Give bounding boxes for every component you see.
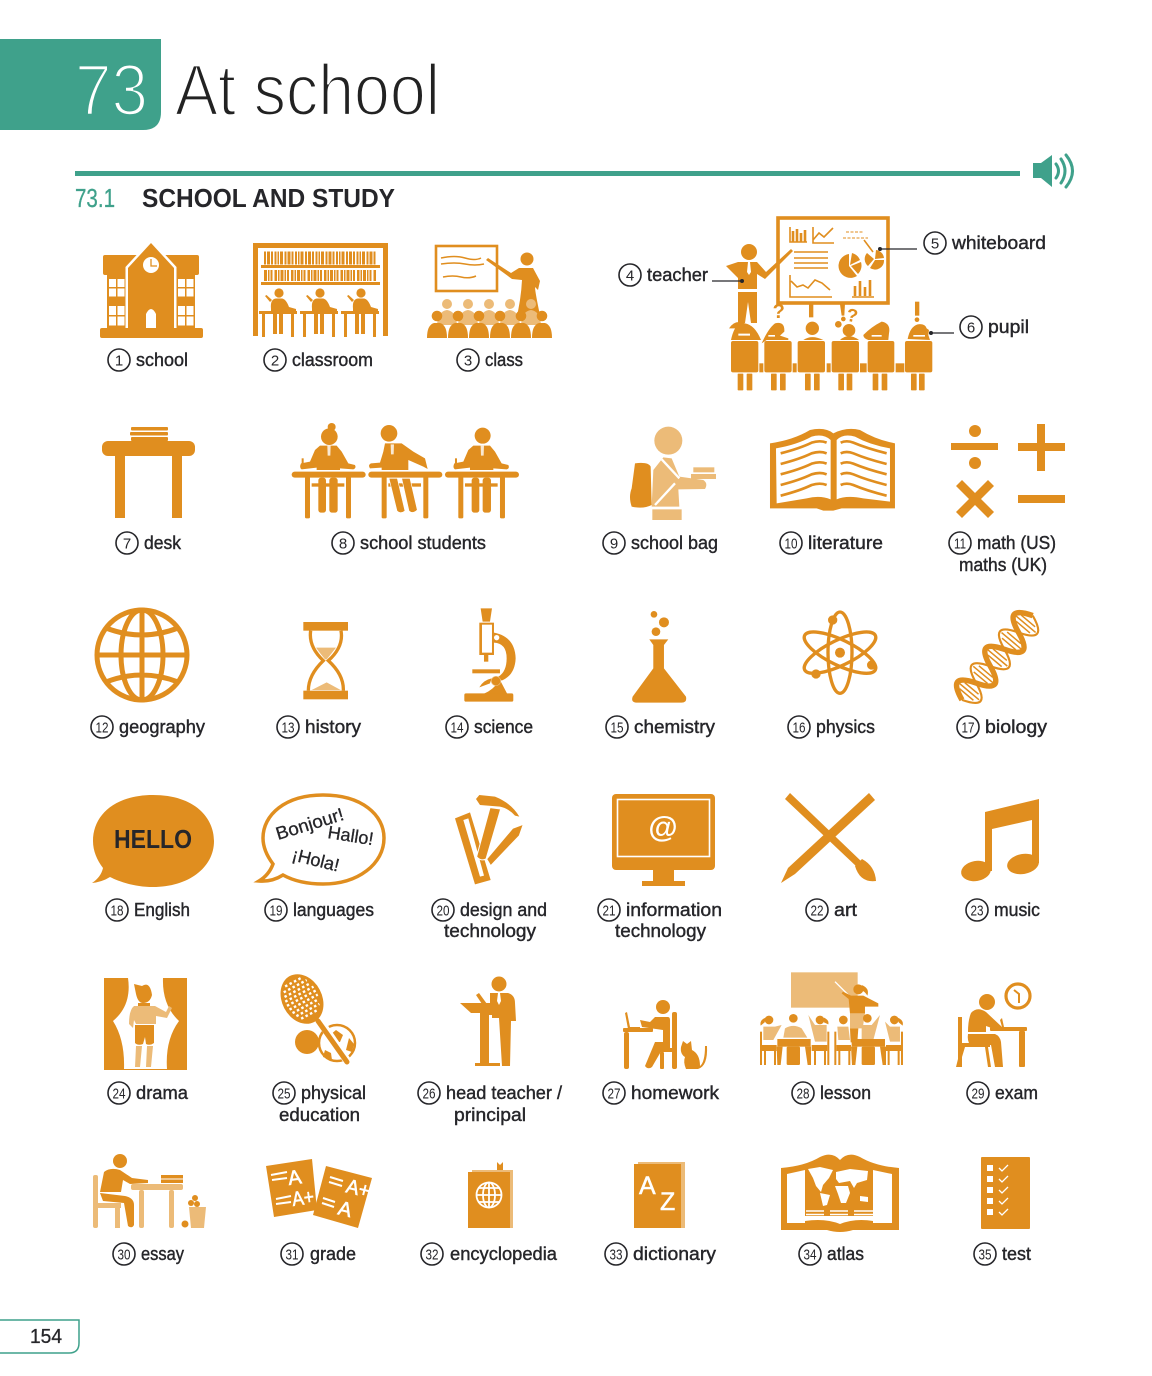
label: encyclopedia: encyclopedia xyxy=(450,1244,558,1264)
label: music xyxy=(966,899,1040,921)
label: physical education: education xyxy=(279,1105,360,1125)
label: biology xyxy=(957,716,1047,738)
label: essay xyxy=(113,1243,184,1265)
icon: encyclopedia with globe xyxy=(468,1162,513,1228)
icon: open book xyxy=(770,429,895,511)
item 3: class xyxy=(427,246,552,371)
label: literature xyxy=(780,532,883,554)
label: desk xyxy=(116,532,182,554)
item 9: school bag xyxy=(603,427,718,554)
label: English: English xyxy=(134,900,190,920)
label: design and technology xyxy=(432,899,547,941)
icon: student with school bag xyxy=(630,427,716,520)
label: languages: languages xyxy=(293,900,374,920)
label: head teacher / principal: 26 xyxy=(422,1086,436,1102)
icon: speech bubble with greetings xyxy=(259,795,384,884)
section heading: 73.1 xyxy=(75,183,115,213)
label: homework: 27 xyxy=(608,1086,620,1102)
label: head teacher / principal: head teacher / xyxy=(446,1083,562,1103)
label: essay: essay xyxy=(141,1244,184,1264)
label: grade: grade xyxy=(310,1244,356,1264)
item 28: lesson xyxy=(760,972,903,1104)
item 29: exam xyxy=(956,984,1038,1104)
item 34: atlas xyxy=(781,1155,899,1265)
label: test: 35 xyxy=(978,1246,992,1264)
label: homework xyxy=(603,1082,720,1104)
label: chemistry xyxy=(606,716,715,738)
callout: pupil: 6 xyxy=(967,320,975,336)
item 10: literature xyxy=(770,429,895,554)
label: math xyxy=(949,532,1056,575)
label: encyclopedia: 32 xyxy=(426,1246,438,1264)
item 17: biology xyxy=(951,606,1047,738)
label: biology: 17 xyxy=(962,720,974,736)
label: drama: 24 xyxy=(112,1086,126,1102)
label: lesson: 28 xyxy=(796,1086,810,1102)
chapter title: At school xyxy=(175,51,440,131)
icon: hourglass xyxy=(303,622,348,699)
item 25: physical education xyxy=(272,967,366,1125)
label: history: 13 xyxy=(282,720,294,736)
item 2: classroom xyxy=(253,243,388,371)
label: classroom: classroom xyxy=(292,350,373,370)
label: lesson xyxy=(792,1082,871,1104)
label: biology: biology xyxy=(985,717,1047,737)
item 12: geography xyxy=(91,610,205,738)
callout: pupil: pupil xyxy=(988,317,1029,337)
label: information technology: 21 xyxy=(602,902,616,920)
page number tab: 154 xyxy=(30,1326,62,1348)
icon: pupils from behind xyxy=(729,301,932,390)
icon: audio speaker xyxy=(1033,155,1072,187)
icon: graded papers: A+ xyxy=(344,1176,372,1203)
label: atlas: atlas xyxy=(827,1244,864,1264)
label: test: test xyxy=(1002,1244,1031,1264)
icon: actor between stage curtains xyxy=(104,978,187,1070)
icon: globe xyxy=(97,610,187,700)
icon: ruler, hammer and pencil xyxy=(455,795,523,884)
label: dictionary: 33 xyxy=(610,1246,622,1264)
label: exam: exam xyxy=(995,1083,1038,1103)
item 8: school students xyxy=(292,423,519,554)
item 20: design and technology xyxy=(432,795,547,941)
icon: student writing exam beside clock xyxy=(956,984,1030,1067)
item 13: history xyxy=(277,622,361,738)
label: physical education: 25 xyxy=(278,1086,290,1102)
label: art: art xyxy=(834,900,857,920)
icon: test paper with checklist xyxy=(981,1157,1030,1229)
label: dictionary: dictionary xyxy=(633,1244,716,1264)
icon: pupils from behind: ? xyxy=(845,304,860,327)
label: math: 11 xyxy=(954,536,966,552)
item 14: science xyxy=(446,608,533,738)
label: school: 1 xyxy=(115,352,123,370)
icon: student writing essay at desk xyxy=(93,1154,206,1228)
item 16: physics xyxy=(788,612,881,738)
label: encyclopedia xyxy=(421,1243,558,1265)
label: classroom: 2 xyxy=(271,352,279,370)
label: art: 22 xyxy=(810,902,824,920)
label: class: class xyxy=(485,350,523,370)
label: school students: school students xyxy=(360,533,486,553)
icon: crossed pencil and brush xyxy=(781,793,876,883)
label: information technology xyxy=(598,899,722,941)
label: languages xyxy=(265,899,374,921)
item 4-6: teaching scene xyxy=(619,218,1046,390)
label: school bag: school bag xyxy=(631,533,718,553)
label: design and technology: design and xyxy=(460,900,547,920)
label: design and technology: 20 xyxy=(436,902,450,920)
label: desk: desk xyxy=(144,533,182,553)
icon: desk with books xyxy=(102,427,195,518)
item 7: desk xyxy=(102,427,195,554)
item 23: music xyxy=(959,799,1040,921)
callout: teacher: 4 xyxy=(626,268,634,284)
label: school bag xyxy=(603,532,718,554)
callout: pupil xyxy=(929,316,1029,338)
chapter number: 73 xyxy=(75,51,148,131)
item 18: English xyxy=(92,795,214,921)
item 22: art xyxy=(781,793,876,921)
label: desk: 7 xyxy=(123,536,131,552)
label: music: 23 xyxy=(970,902,984,920)
item 1: school xyxy=(100,243,203,371)
icon: teacher figure xyxy=(726,244,793,323)
label: languages: 19 xyxy=(270,902,282,920)
label: design and technology: technology xyxy=(444,921,536,941)
callout: whiteboard: whiteboard xyxy=(951,233,1046,253)
icon: tennis racket and balls xyxy=(272,967,355,1062)
label: history xyxy=(277,716,361,738)
label: class: 3 xyxy=(464,352,472,370)
label: chemistry: 15 xyxy=(610,720,624,736)
label: physical education: physical xyxy=(301,1083,366,1103)
label: school students: 8 xyxy=(339,536,347,552)
icon: speech bubble with greetings: Hallo! xyxy=(326,822,375,849)
label: science xyxy=(446,716,533,738)
icon: atom xyxy=(799,612,881,693)
item 32: encyclopedia xyxy=(421,1162,558,1265)
icon: speech bubble with greetings: Bonjour! xyxy=(273,804,346,844)
icon: graded papers: A xyxy=(287,1166,304,1190)
label: head teacher / principal xyxy=(418,1082,562,1125)
icon: A-Z dictionary: Z xyxy=(660,1188,675,1216)
item 27: homework xyxy=(603,1000,720,1104)
icon: A-Z dictionary: A xyxy=(639,1172,656,1200)
icon: graded papers xyxy=(266,1159,372,1228)
label: class xyxy=(457,349,523,371)
item 26: head teacher / principal xyxy=(418,976,562,1125)
item 30: essay xyxy=(93,1154,206,1265)
label: essay: 30 xyxy=(118,1246,130,1264)
label: lesson: lesson xyxy=(820,1083,871,1103)
label: head teacher / principal: principal xyxy=(454,1105,526,1125)
label: science: science xyxy=(474,717,533,737)
icon: whiteboard with charts xyxy=(778,218,888,303)
label: classroom xyxy=(264,349,373,371)
label: homework: homework xyxy=(631,1083,720,1103)
label: math: math (US) xyxy=(977,533,1056,553)
label: information technology: information xyxy=(626,900,722,920)
icon: flask with bubbles xyxy=(632,611,686,703)
label: dictionary xyxy=(605,1243,716,1265)
label: grade xyxy=(281,1243,356,1265)
icon: A-Z dictionary xyxy=(634,1162,685,1228)
chapter header tab xyxy=(0,39,161,131)
icon: computer monitor: @ xyxy=(648,811,678,844)
label: music: music xyxy=(994,900,1040,920)
label: English xyxy=(106,899,190,921)
label: information technology: technology xyxy=(615,921,706,941)
icon: teacher and pupils around tables xyxy=(760,972,903,1065)
label: art xyxy=(806,899,857,921)
icon: DNA helix xyxy=(951,606,1044,710)
icon: three students at desks xyxy=(292,423,519,518)
icon: graded papers: A xyxy=(336,1198,355,1222)
icon: classroom with shelves and students xyxy=(253,243,388,337)
item 15: chemistry xyxy=(606,611,715,738)
item 31: grade xyxy=(266,1159,372,1265)
icon: speech bubble with greetings: ¡Hola! xyxy=(290,844,341,875)
icon: math symbols xyxy=(951,424,1065,518)
icon: musical notes xyxy=(959,799,1040,883)
item 21: information technology xyxy=(598,794,722,941)
section heading: SCHOOL AND STUDY xyxy=(142,183,395,213)
item 11: math xyxy=(949,424,1065,575)
label: school xyxy=(108,349,188,371)
section rule xyxy=(75,171,1020,176)
item 19: languages xyxy=(259,795,384,921)
icon: computer monitor xyxy=(612,794,715,886)
label: science: 14 xyxy=(450,720,464,736)
label: physical education xyxy=(273,1082,366,1125)
label: drama: drama xyxy=(136,1083,189,1103)
item 35: test xyxy=(974,1157,1031,1265)
callout: teacher xyxy=(619,264,744,286)
icon: microscope xyxy=(464,608,516,702)
label: school: school xyxy=(136,350,188,370)
icon: HELLO speech bubble: HELLO xyxy=(114,824,192,854)
icon: open atlas with world map xyxy=(781,1155,899,1232)
label: math: maths (UK) xyxy=(959,555,1047,575)
label: geography xyxy=(91,716,205,738)
page number tab xyxy=(0,1320,79,1353)
callout: whiteboard: 5 xyxy=(931,236,939,252)
callout: teacher: teacher xyxy=(647,265,708,285)
label: English: 18 xyxy=(110,902,124,920)
icon: graded papers: A+ xyxy=(291,1186,315,1211)
label: drama xyxy=(108,1082,189,1104)
icon: child doing homework with cat xyxy=(623,1000,707,1069)
label: exam xyxy=(967,1082,1038,1104)
icon: principal at lectern xyxy=(460,976,516,1066)
label: literature: literature xyxy=(808,533,883,553)
icon: class with teacher and seated pupils xyxy=(427,246,552,338)
label: atlas: 34 xyxy=(804,1246,816,1264)
label: atlas xyxy=(799,1243,864,1265)
label: school bag: 9 xyxy=(610,536,618,552)
label: physics xyxy=(788,716,875,738)
label: geography: geography xyxy=(119,717,205,737)
label: chemistry: chemistry xyxy=(634,717,715,737)
icon: pupils from behind: ? xyxy=(773,301,785,323)
label: geography: 12 xyxy=(96,720,108,736)
label: physics: 16 xyxy=(792,720,806,736)
label: exam: 29 xyxy=(972,1086,984,1102)
label: physics: physics xyxy=(816,717,875,737)
label: test xyxy=(974,1243,1031,1265)
icon: school building xyxy=(100,243,203,338)
label: history: history xyxy=(305,717,361,737)
item 33: dictionary xyxy=(605,1162,716,1265)
label: grade: 31 xyxy=(286,1246,298,1264)
label: literature: 10 xyxy=(784,536,798,552)
callout: whiteboard xyxy=(878,232,1046,254)
item 24: drama xyxy=(104,978,189,1104)
